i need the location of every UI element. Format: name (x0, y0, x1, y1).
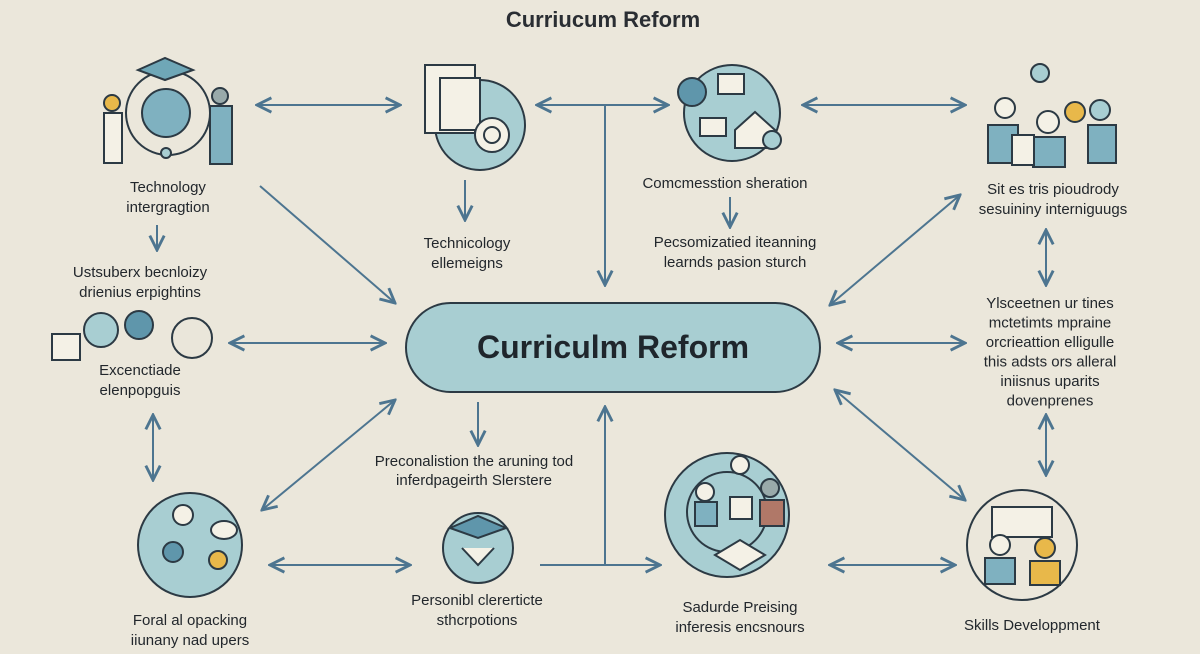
text block right: this adsts ors alleral (984, 354, 1116, 370)
label: technology integration: Technology (130, 179, 206, 196)
label: sadurde: Sadurde Preising (682, 599, 798, 616)
label: technology integration: intergragtion (126, 199, 210, 216)
text: pecsomizatied: learnds pasion sturch (664, 254, 806, 271)
label: sadurde: inferesis encsnours (675, 619, 805, 636)
icon: documents (425, 65, 525, 170)
label: sit es tris: Sit es tris pioudrody (987, 181, 1119, 198)
icons row left (52, 311, 212, 360)
text block right: orcrieattion elligulle (986, 334, 1114, 351)
icon: mortarboard circle (443, 513, 513, 583)
label: excenctiade: Excenctiade (99, 362, 181, 379)
label: sit es tris: sesuininy interniguugs (979, 201, 1127, 218)
icon circle top center-right (678, 65, 781, 161)
label: personibl: Personibl clererticte (411, 592, 543, 609)
icon: skills development (967, 490, 1077, 600)
label: excenctiade: elenpopguis (100, 382, 180, 399)
text block left: Ustsuberx becnloizy (73, 264, 208, 281)
label: technicology: Technicology (424, 235, 511, 252)
text: preconalistion: Preconalistion the aruning tod (375, 453, 573, 470)
icon: technology integration (104, 58, 232, 164)
text block right: iniisnus uparits (1000, 373, 1100, 390)
text block right: Ylsceetnen ur tines (986, 295, 1114, 312)
central pill: Curriculm Reform (477, 329, 749, 365)
label: personibl: sthcrpotions (437, 612, 517, 629)
label: comcmesstion: Comcmesstion sheration (642, 175, 808, 192)
label: foral: Foral al opacking (133, 612, 247, 629)
central pill (406, 303, 820, 392)
text: pecsomizatied: Pecsomizatied iteanning (654, 234, 816, 251)
title: Curriucum Reform (506, 7, 700, 32)
text block right: dovenprenes (1007, 392, 1093, 410)
icon: people group (988, 64, 1116, 167)
text: preconalistion: inferdpageirth Slerstere (396, 472, 552, 489)
icon circle bottom left (138, 493, 242, 597)
arrows (153, 105, 1046, 565)
label: foral: iiunany nad upers (131, 632, 249, 649)
label: skills: Skills Developpment (964, 617, 1101, 634)
text block right: mctetimts mpraine (989, 314, 1111, 332)
label: technicology: ellemeigns (431, 255, 503, 272)
text block left: drienius erpightins (79, 284, 201, 301)
icon circle bottom center-right (665, 453, 789, 577)
